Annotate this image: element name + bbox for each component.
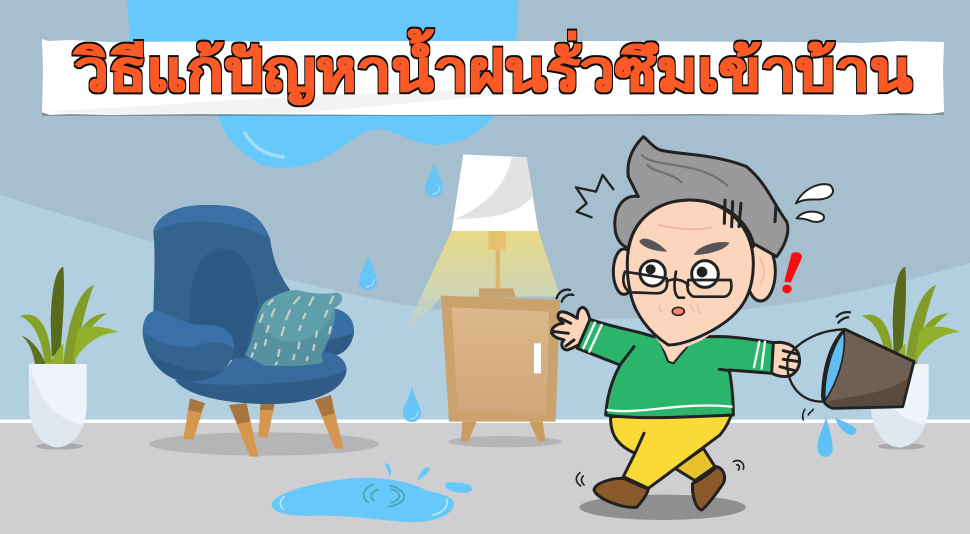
left potted plant bbox=[20, 267, 118, 450]
skirting line bbox=[0, 420, 970, 423]
sweater stripes bbox=[583, 323, 765, 411]
elderly man character holding a leaking pot bbox=[552, 137, 914, 520]
water drop 2 bbox=[359, 255, 377, 290]
title banner bbox=[42, 29, 944, 116]
falling pot water bbox=[818, 417, 857, 457]
bedside lamp and cabinet bbox=[400, 154, 562, 447]
water drop 3 bbox=[403, 387, 421, 422]
background: lighter wall curve bbox=[0, 195, 970, 421]
leaking pot bbox=[787, 329, 914, 408]
shoes bbox=[594, 467, 725, 510]
trousers bbox=[611, 413, 732, 488]
head bbox=[613, 200, 775, 362]
torn paper strip bbox=[42, 39, 944, 115]
banner shadow bbox=[42, 111, 944, 116]
neck bbox=[661, 342, 687, 363]
water drop 1 bbox=[425, 163, 443, 197]
sweat drops bbox=[796, 184, 833, 222]
floor puddle bbox=[272, 463, 472, 522]
floor bbox=[0, 423, 970, 534]
green sweater bbox=[577, 319, 773, 418]
face details bbox=[623, 225, 731, 315]
motion and emphasis marks bbox=[557, 175, 850, 486]
grey hair bbox=[615, 137, 788, 257]
ceiling water leak bbox=[127, 0, 518, 168]
armchair bbox=[143, 205, 379, 457]
hands bbox=[552, 307, 800, 376]
exclamation mark bbox=[782, 252, 802, 293]
right potted plant bbox=[862, 267, 960, 450]
title text: วิธีแก้ปัญหาน้ำฝนรั่วซึมเข้าบ้าน bbox=[72, 29, 912, 105]
ground shadow bbox=[579, 495, 746, 520]
